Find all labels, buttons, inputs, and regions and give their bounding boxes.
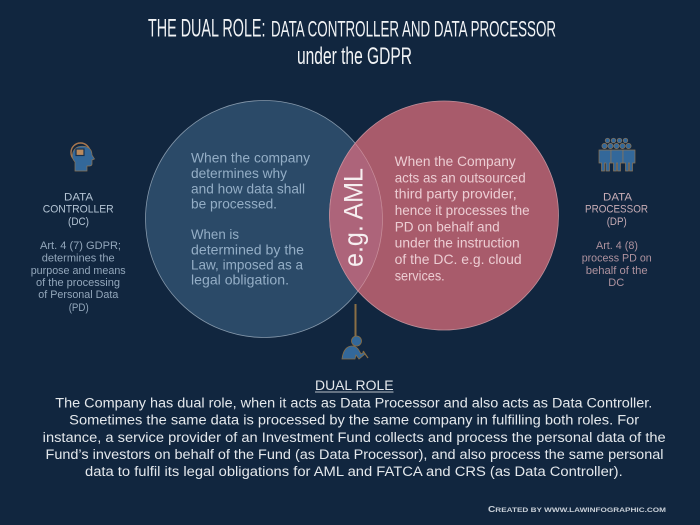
text: data controller definition: purpose and means <box>31 265 126 277</box>
panel: venn diagram <box>146 100 558 338</box>
title: under the GDPR <box>297 43 412 70</box>
text: data processor definition: Art. 4 (8) <box>596 240 638 252</box>
text: data processor definition: DC <box>608 277 624 289</box>
text: data processor heading <box>585 192 648 228</box>
paragraph: dual role explanation <box>43 395 666 480</box>
icon: person at desk with pointer line <box>342 304 368 359</box>
text: data processor definition <box>582 240 652 289</box>
heading: dual role: DUAL ROLE <box>315 378 394 394</box>
text: data controller definition: determines the <box>42 253 115 265</box>
text: processor circle: When the Company <box>395 154 516 169</box>
text: data controller definition: Art. 4 (7) GDPR; <box>40 240 121 252</box>
text: data controller definition: (PD) <box>69 302 89 314</box>
panel: data processor <box>582 138 652 289</box>
text: controller circle <box>191 151 310 288</box>
text: processor circle: acts as an outsourced <box>395 170 526 185</box>
overlap lens <box>330 143 382 291</box>
text: processor circle: third party provider, <box>395 187 517 202</box>
text: processor circle: hence it processes the <box>395 203 530 218</box>
text block: dual role <box>43 378 666 480</box>
text: data processor definition: process PD on <box>582 253 652 265</box>
text: controller circle: legal obligation. <box>191 273 289 288</box>
text: data controller heading: DATA <box>64 192 93 204</box>
text: data processor heading: DATA <box>603 192 632 204</box>
text: controller circle: Law, imposed as a <box>191 258 303 273</box>
paragraph: dual role explanation: The Company has dual role, when it acts as Data Processor and also acts as Data Controller. <box>55 395 652 411</box>
text: data controller heading <box>43 192 114 228</box>
icon: group of people <box>599 138 635 171</box>
credit line: CREATED BY WWW.LAWINFOGRAPHIC.COM <box>488 505 666 514</box>
circle: data controller <box>146 100 382 338</box>
paragraph: dual role explanation: Fund’s investors on behalf of the Fund (as Data Processor), and also process the same personal <box>46 447 663 463</box>
text: controller circle: determined by the <box>191 242 304 257</box>
text: data controller definition: of Personal Data <box>38 289 119 301</box>
text: processor circle: PD on behalf and <box>395 219 500 234</box>
paragraph: dual role explanation: Sometimes the same data is processed by the same company in fulfilling both roles. For <box>69 412 639 428</box>
text: data controller heading: CONTROLLER <box>43 204 114 216</box>
title: THE DUAL ROLE: <box>148 14 266 42</box>
text: data processor heading: PROCESSOR <box>585 204 648 216</box>
text: processor circle: under the instruction <box>395 236 520 251</box>
text: controller circle: be processed. <box>191 196 277 211</box>
text: controller circle: determines why <box>191 166 287 181</box>
circle: data processor <box>330 101 558 330</box>
text: controller circle: When is <box>191 227 239 242</box>
text: data controller definition <box>31 240 126 314</box>
text: processor circle <box>395 154 530 283</box>
text: controller circle: When the company <box>191 151 310 166</box>
icon: head with gear <box>71 143 94 171</box>
text: data processor definition: behalf of the <box>586 265 648 277</box>
text: data controller definition: of the processing <box>36 277 120 289</box>
panel: data controller <box>31 143 126 314</box>
text: data processor heading: (DP) <box>607 216 627 228</box>
paragraph: dual role explanation: instance, a service provider of an Investment Fund collects and process the personal data of the <box>43 430 666 446</box>
paragraph: dual role explanation: data to fulfil its legal obligations for AML and FATCA and CRS (as Data Controller). <box>85 464 623 480</box>
title <box>148 14 556 70</box>
text: processor circle: services. <box>395 268 445 283</box>
text: controller circle: and how data shall <box>191 181 305 196</box>
text: data controller heading: (DC) <box>68 216 89 228</box>
text: e.g. AML: e.g. AML <box>339 168 369 267</box>
text: processor circle: of the DC. e.g. cloud <box>395 252 522 267</box>
